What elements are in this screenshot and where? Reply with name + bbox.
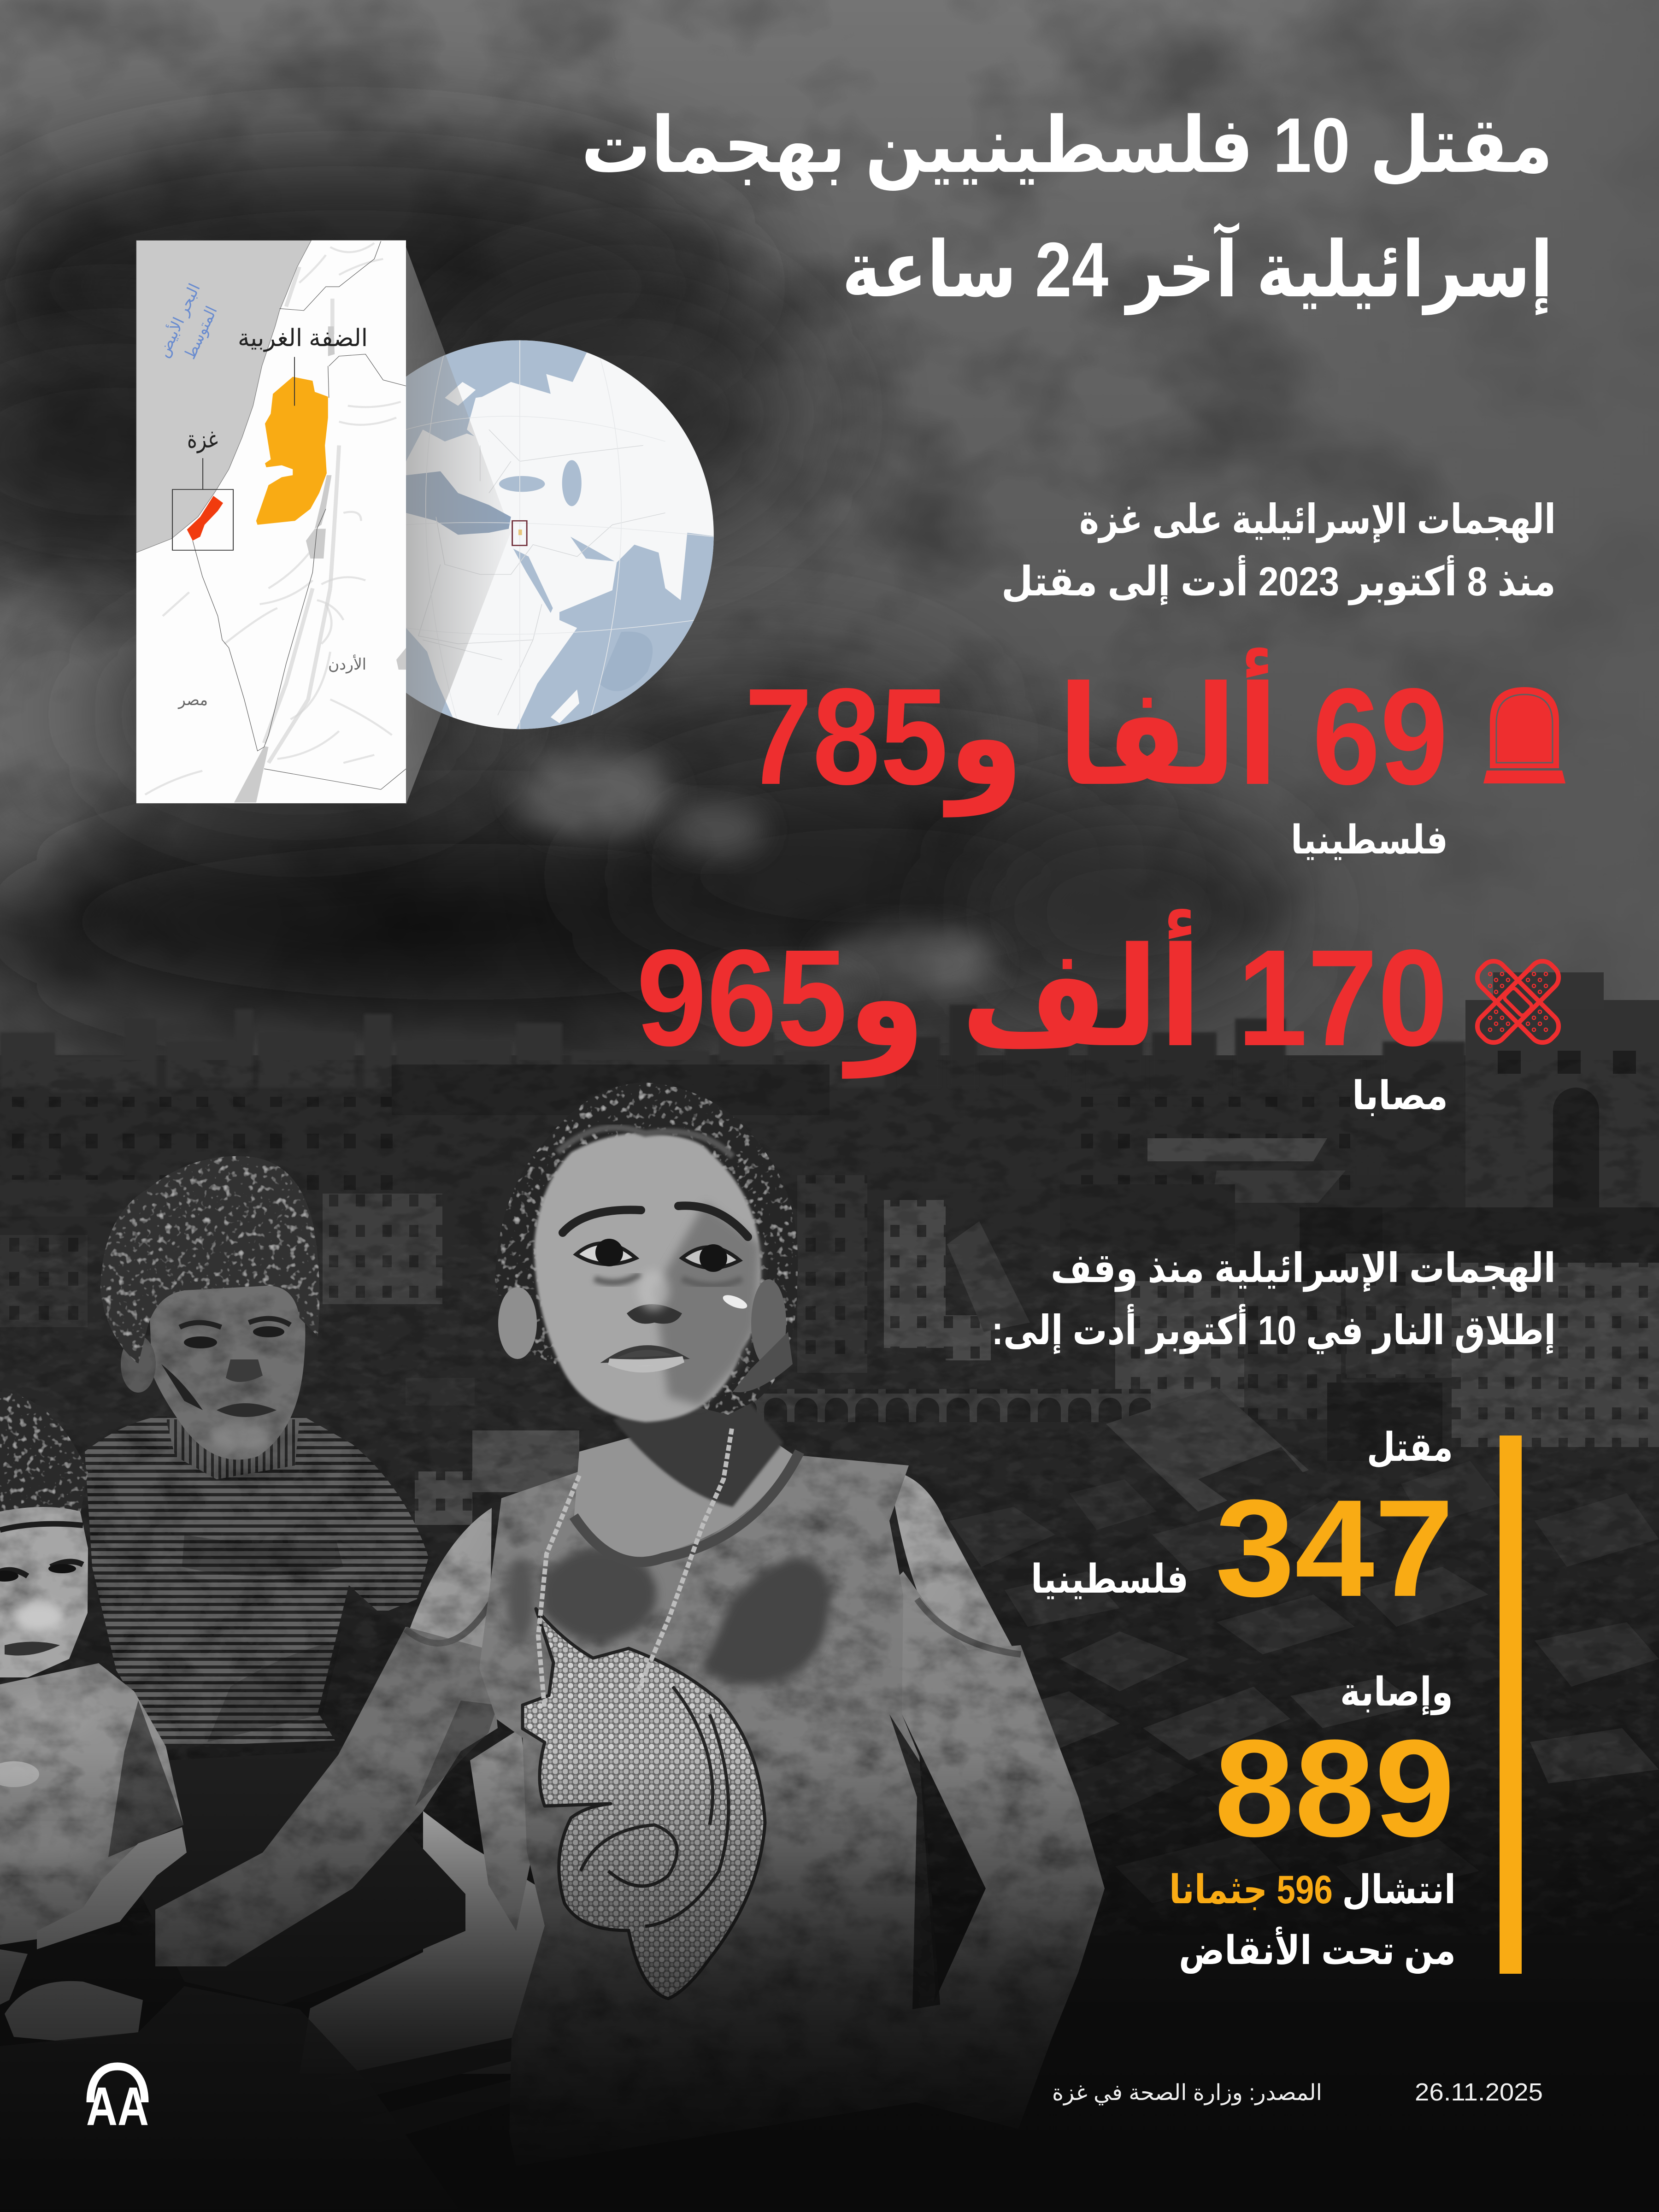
unicorn mane lines xyxy=(581,1687,729,1926)
boy face xyxy=(121,1286,305,1460)
intro text: attacks since 8 October 2023: الهجمات الإسرائيلية على غزة xyxy=(1079,496,1556,543)
source: المصدر: وزارة الصحة في غزة xyxy=(1052,2081,1322,2106)
globe with map inset xyxy=(136,240,718,805)
label: palestinians: فلسطينيا xyxy=(1291,818,1448,862)
label: mediterranean sea line 2: المتوسط xyxy=(181,304,221,362)
dead sea, jordan valley, gulf of aqaba xyxy=(234,326,406,802)
intro text: attacks since ceasefire xyxy=(992,1245,1556,1354)
intro text: attacks since ceasefire: الهجمات الإسرائيلية منذ وقف xyxy=(1051,1245,1556,1292)
photo: girl xyxy=(155,1082,1105,2166)
tear mark on cheek xyxy=(721,1292,749,1312)
icon: gravestone xyxy=(1483,687,1565,783)
floor behind children xyxy=(300,1811,567,2143)
stat: injured since ceasefire: 889 xyxy=(1214,1711,1455,1865)
girl torso with shirt xyxy=(479,1455,940,2166)
girl lips xyxy=(608,1347,682,1360)
map labels xyxy=(153,280,368,709)
gaza strip xyxy=(187,496,223,541)
map panel xyxy=(136,240,406,803)
stat: injured since ceasefire: وإصابة xyxy=(1340,1670,1453,1716)
title: مقتل 10 فلسطينيين بهجمات xyxy=(581,102,1553,191)
label: jordan: الأردن xyxy=(328,654,366,673)
globe xyxy=(406,340,714,729)
necklace xyxy=(538,1429,732,1710)
locator rectangle on globe xyxy=(512,521,527,546)
background: ruined city xyxy=(0,972,1659,2212)
stat: killed since ceasefire: 347 xyxy=(1215,1471,1454,1625)
label: west bank: الضفة الغربية xyxy=(238,325,368,352)
leader lines xyxy=(203,357,294,489)
shirt stains xyxy=(507,1548,830,1685)
recovered bodies text: من تحت الأنقاض xyxy=(1179,1927,1456,1974)
stat: killed since ceasefire: مقتل xyxy=(1367,1425,1453,1470)
cone connecting globe to map xyxy=(406,247,511,805)
recovered bodies text xyxy=(1169,1868,1456,1974)
borders xyxy=(193,241,406,789)
intro text: attacks since 8 October 2023 xyxy=(1001,496,1556,606)
girl eyes xyxy=(576,1239,740,1272)
gaza locator box xyxy=(172,489,233,550)
stat: total injured: 170 ألف و965 xyxy=(636,908,1448,1079)
girl left arm sleeve xyxy=(155,1508,535,1966)
stat: total killed: 69 ألفا و785 xyxy=(745,647,1448,818)
west bank xyxy=(256,377,328,525)
neck and chest xyxy=(574,1410,794,1560)
terrain relief xyxy=(145,243,401,794)
label: egypt: مصر xyxy=(177,691,208,709)
label: gaza: غزة xyxy=(187,426,218,453)
logo: Anadolu Agency: AA xyxy=(86,2076,149,2137)
girl nose xyxy=(627,1304,682,1324)
stat: killed since ceasefire xyxy=(1031,1425,1454,1625)
recovered bodies text: انتشال 596 جثمانا xyxy=(1169,1868,1456,1912)
photo: small child on the left xyxy=(0,1392,461,2212)
date: 26.11.2025 xyxy=(1415,2078,1543,2106)
intro text: attacks since 8 October 2023: منذ 8 أكتوبر 2023 أدت إلى مقتل xyxy=(1001,555,1556,606)
girl head xyxy=(495,1082,798,1422)
dark fade over bottom of the photo xyxy=(0,1751,1659,2212)
orange vertical bar xyxy=(1500,1435,1522,1974)
title: إسرائيلية آخر 24 ساعة xyxy=(842,222,1553,315)
girl eyebrows xyxy=(563,1206,748,1237)
label: mediterranean sea: البحر الأبيض xyxy=(153,280,204,360)
intro text: attacks since ceasefire: إطلاق النار في 10 أكتوبر أدت إلى: xyxy=(992,1304,1556,1354)
background: smoke-filled sky xyxy=(0,0,1659,1244)
icon: crossed bandages xyxy=(1472,956,1564,1048)
title xyxy=(581,102,1553,315)
label: injured: مصابا xyxy=(1352,1074,1448,1118)
photo: boy in sweater xyxy=(85,1156,465,2005)
stat: killed since ceasefire: فلسطينيا xyxy=(1031,1557,1188,1601)
sea xyxy=(136,240,311,553)
unicorn sequin patch xyxy=(523,1609,765,1999)
girl right arm xyxy=(885,1470,1105,2129)
boy hair xyxy=(100,1156,319,1364)
